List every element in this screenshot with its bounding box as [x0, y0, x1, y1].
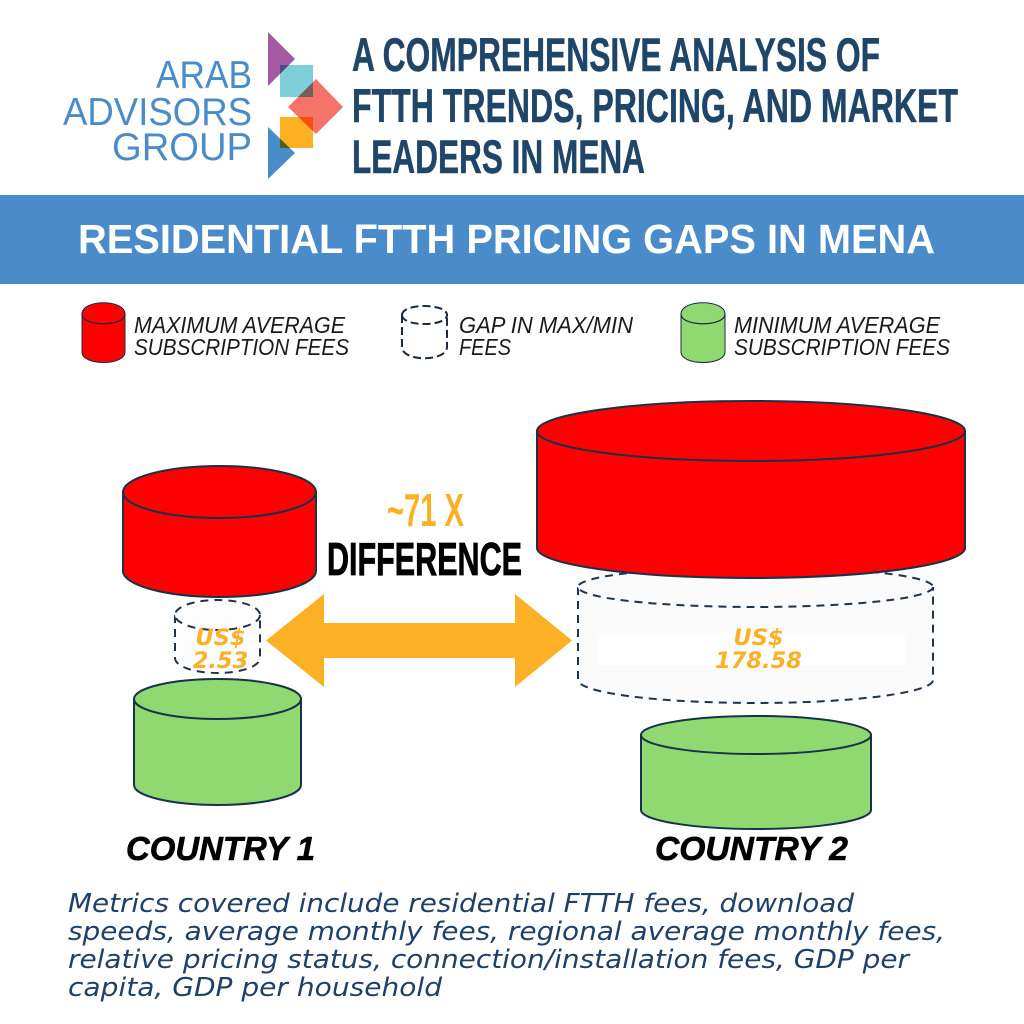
gap value — [193, 625, 248, 674]
legend — [82, 303, 951, 362]
gap value: 178.58 — [715, 648, 802, 674]
multiple callout — [327, 484, 522, 585]
gap value — [715, 625, 802, 674]
logo wordmark — [63, 54, 252, 169]
arrow: double headed — [266, 594, 572, 687]
section banner: RESIDENTIAL FTTH PRICING GAPS IN MENA — [78, 216, 935, 262]
section banner — [0, 195, 1024, 284]
metrics description: Metrics covered include residential FTTH fees, download — [68, 889, 855, 919]
multiple callout: ~71 X — [387, 484, 464, 536]
metrics description: relative pricing status, connection/installation fees, GDP per — [68, 945, 911, 975]
country 1 maximum cylinder — [123, 466, 316, 597]
gap value: US$ — [733, 625, 784, 651]
metrics description: capita, GDP per household — [68, 973, 443, 1003]
country 2 label: COUNTRY 2 — [655, 830, 849, 867]
country 1 minimum cylinder — [134, 679, 301, 805]
multiple callout: DIFFERENCE — [327, 533, 522, 585]
legend: maximum: SUBSCRIPTION FEES — [134, 334, 350, 360]
legend: minimum: SUBSCRIPTION FEES — [734, 334, 951, 360]
logo wordmark: ARAB — [156, 54, 252, 97]
logo wordmark: GROUP — [112, 126, 252, 169]
logo mark — [268, 32, 343, 179]
metrics description: speeds, average monthly fees, regional average monthly fees, — [68, 917, 945, 947]
country 2 gap cylinder — [578, 567, 933, 703]
country 2 maximum cylinder — [537, 401, 965, 578]
title — [352, 28, 958, 183]
legend: gap: FEES — [459, 334, 512, 360]
country 2 minimum cylinder — [641, 716, 871, 829]
logo wordmark: ADVISORS — [63, 91, 252, 134]
legend: maximum — [82, 303, 350, 362]
title: LEADERS IN MENA — [352, 130, 645, 183]
country 1 gap cylinder — [175, 600, 260, 674]
legend: minimum — [681, 303, 951, 362]
legend: minimum: MINIMUM AVERAGE — [734, 312, 941, 338]
legend: gap: GAP IN MAX/MIN — [459, 312, 633, 338]
country 1 label: COUNTRY 1 — [126, 830, 315, 867]
gap value: 2.53 — [193, 648, 248, 674]
logo — [63, 32, 343, 179]
legend: maximum: MAXIMUM AVERAGE — [134, 312, 346, 338]
legend: gap — [402, 306, 633, 360]
metrics description — [68, 889, 945, 1003]
gap value: US$ — [195, 625, 246, 651]
